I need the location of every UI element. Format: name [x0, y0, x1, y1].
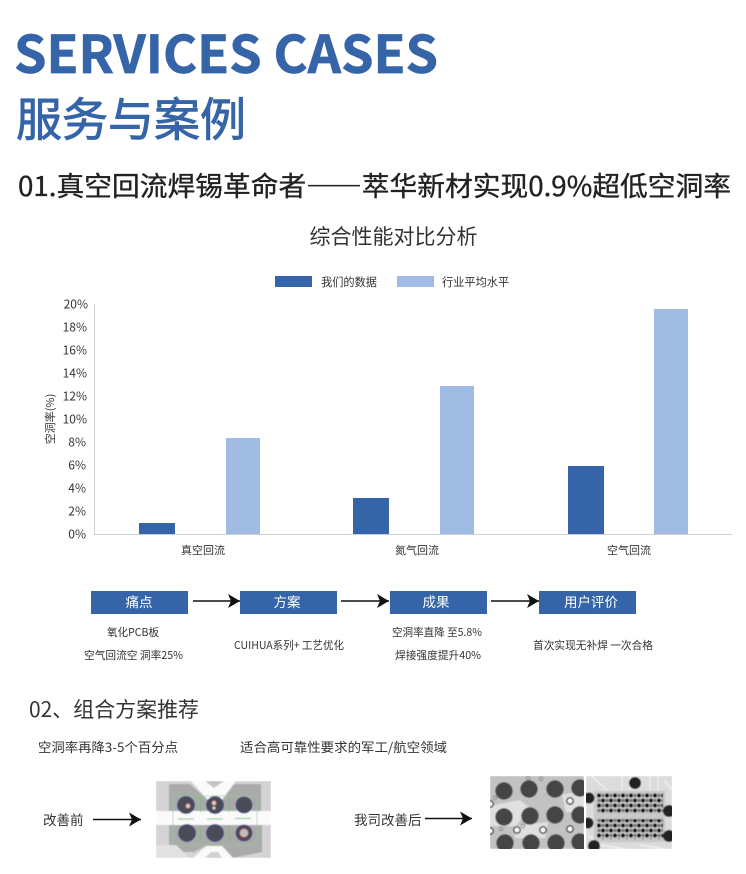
- y axis labels: 4%: [68, 480, 86, 496]
- heading: section 01: 01.真空回流焊锡革命者——萃华新材实现0.9%超低空洞率: [18, 165, 731, 204]
- flow step: 用户评价: [533, 591, 653, 653]
- flow step: 成果: 空洞率直降 至5.8%: [392, 624, 482, 640]
- note right: 适合高可靠性要求的军工/航空领域: [240, 737, 447, 756]
- y axis labels: 8%: [68, 434, 86, 450]
- flow step: 方案: CUIHUA系列+ 工艺优化: [234, 637, 344, 653]
- label: before: 改善前: [43, 809, 84, 829]
- heading: section 02: 02、组合方案推荐: [29, 694, 199, 724]
- bars: 氮气回流: [353, 386, 474, 534]
- arrow: [341, 600, 389, 602]
- arrow: [93, 818, 141, 820]
- y axis labels: 12%: [63, 388, 87, 404]
- flow step: 用户评价: 首次实现无补焊 一次合格: [533, 637, 653, 653]
- flow step: 痛点: 痛点: [126, 591, 152, 611]
- x axis labels: 真空回流: [181, 542, 225, 558]
- arrow: [425, 818, 472, 820]
- note left: 空洞率再降3-5个百分点: [38, 737, 178, 756]
- x axis labels: 空气回流: [607, 542, 651, 558]
- bar chart: [42, 274, 732, 558]
- flow step: 成果: [390, 591, 487, 663]
- y axis labels: [63, 296, 88, 542]
- x axis labels: [181, 542, 651, 558]
- y axis labels: 14%: [63, 364, 87, 382]
- image: after X-ray close-up: [490, 776, 584, 849]
- label: after: 我司改善后: [354, 809, 422, 829]
- y axis labels: 2%: [68, 502, 86, 520]
- chart title: 综合性能对比分析: [310, 221, 478, 251]
- y axis labels: 16%: [63, 342, 87, 358]
- flow step: 痛点: 空气回流空 洞率25%: [84, 647, 183, 663]
- y axis labels: 18%: [63, 318, 87, 336]
- y axis labels: 10%: [63, 410, 87, 428]
- bars: 空气回流: [568, 309, 688, 534]
- flow step: 痛点: 氧化PCB板: [107, 624, 159, 640]
- y axis labels: 20%: [64, 296, 88, 312]
- flow step: 成果: 成果: [422, 591, 450, 611]
- legend: [275, 274, 509, 290]
- image: before X-ray: [156, 781, 271, 858]
- flow step: 痛点: [84, 591, 188, 663]
- y axis labels: 0%: [68, 526, 86, 542]
- arrow: [193, 600, 240, 602]
- y axis title: 空洞率(%): [42, 394, 58, 444]
- flow step: 用户评价: 用户评价: [564, 591, 618, 611]
- flow step: 方案: [234, 591, 344, 653]
- flow step: 成果: 焊接强度提升40%: [395, 647, 481, 663]
- legend: 行业平均水平: [442, 274, 509, 290]
- arrow: [491, 600, 539, 602]
- flow step: 方案: 方案: [274, 591, 301, 611]
- x axis labels: 氮气回流: [395, 542, 439, 558]
- bars: 真空回流: [139, 438, 260, 534]
- y axis labels: 6%: [68, 456, 86, 474]
- image: after X-ray full BGA: [586, 776, 672, 849]
- subtitle: 服务与案例: [16, 84, 246, 150]
- legend: 我们的数据: [321, 274, 377, 290]
- title: SERVICES CASES: [14, 13, 438, 88]
